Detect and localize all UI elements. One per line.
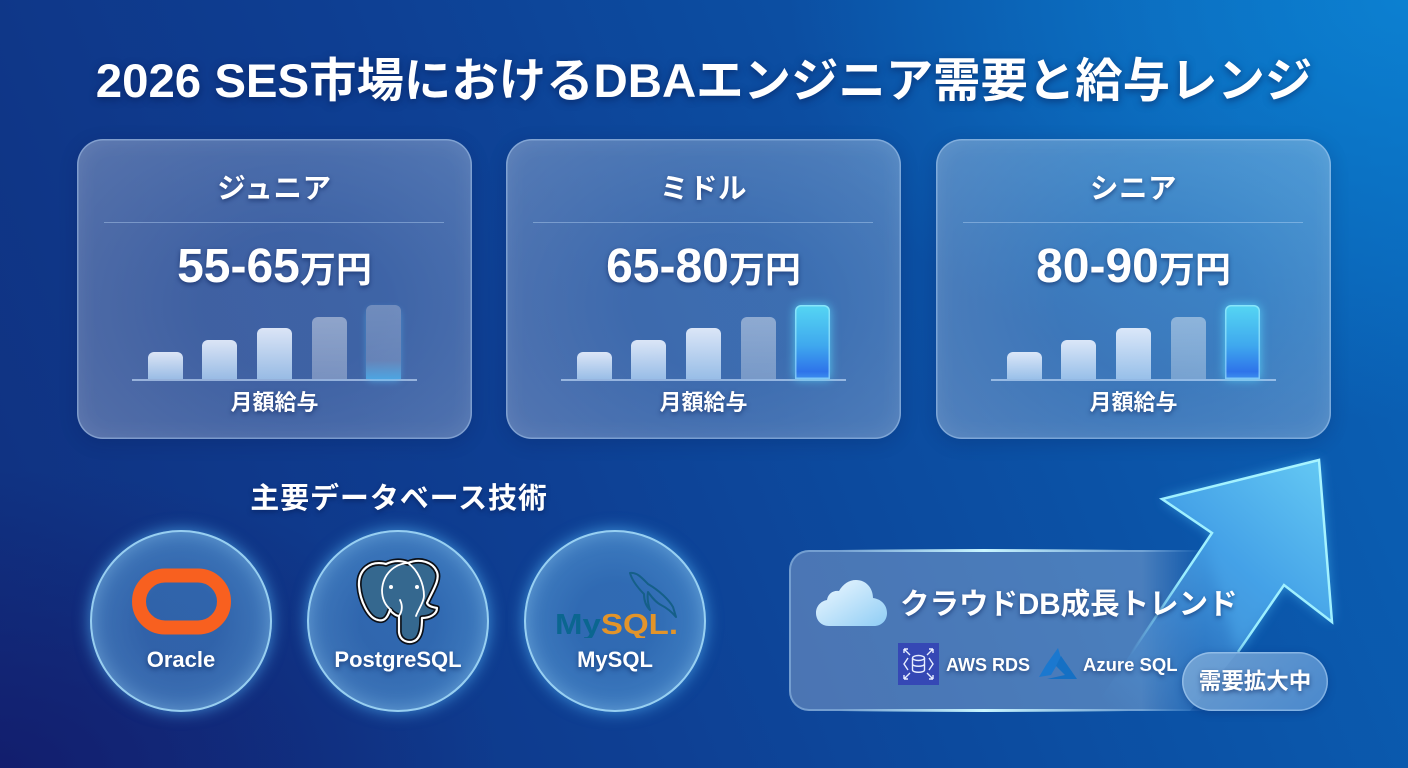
icon: Azure [1039,648,1077,679]
callout: demand growing [1182,652,1328,711]
badge: PostgreSQL [307,530,489,712]
icon: cloud [816,580,887,626]
bar chart: junior [132,305,417,384]
label: Azure SQL: Azure SQL [1083,654,1178,675]
icon: Oracle ring [132,568,231,634]
label: AWS RDS: AWS RDS [946,655,1030,675]
salary value: senior: 80-90万円 [1036,240,1231,293]
panel: junior salary [77,139,472,439]
label: PostgreSQL: PostgreSQL [334,647,462,672]
heading: middle: ミドル [660,173,747,205]
panel: cloud DB growth trend [789,549,1200,712]
badge: MySQL [524,530,706,712]
heading: database technologies: 主要データベース技術 [250,483,548,515]
icon: MySQL logo [555,572,678,638]
salary value: middle: 65-80万円 [606,240,801,293]
icon: AWS RDS [898,643,939,685]
chart label: middle: 月額給与 [659,390,748,415]
glow: bottom edge [839,709,1129,712]
bar chart: middle [561,299,846,385]
bar chart: senior [991,299,1276,385]
heading: junior: ジュニア [217,173,332,205]
salary value: junior: 55-65万円 [177,240,372,293]
label: MySQL: MySQL [577,647,653,672]
chart label: senior: 月額給与 [1089,390,1178,415]
panel: senior salary [936,139,1331,439]
panel: middle salary [506,139,901,439]
glow: top edge [839,549,1129,552]
arrow: growth [1130,456,1337,711]
chart label: junior: 月額給与 [230,390,318,415]
badge: Oracle [90,530,272,712]
label: Oracle: Oracle [147,647,215,672]
callout: demand growing: 需要拡大中 [1199,669,1311,694]
title: 2026 SES市場におけるDBAエンジニア需要と給与レンジ [96,55,1312,108]
heading: senior: シニア [1090,173,1177,205]
icon: PostgreSQL elephant [356,558,440,645]
panel body [789,550,1219,711]
cloud trend heading: クラウドDB成長トレンド [900,588,1238,621]
